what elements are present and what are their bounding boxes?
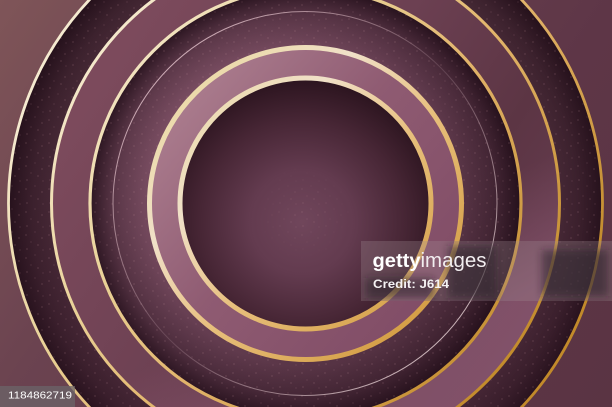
image id label (0, 386, 75, 407)
image id label: 1184862719 (8, 390, 73, 402)
centre disc with gold rim (180, 78, 431, 329)
watermark: getty images credit: Credit: J614 (373, 279, 450, 291)
watermark: getty images credit (361, 241, 612, 301)
ring: light mauve band (150, 48, 462, 360)
watermark: getty images credit: getty (372, 251, 421, 272)
ring: shaded band with thin highlight line (90, 0, 521, 407)
watermark: getty images credit: images (420, 250, 486, 272)
